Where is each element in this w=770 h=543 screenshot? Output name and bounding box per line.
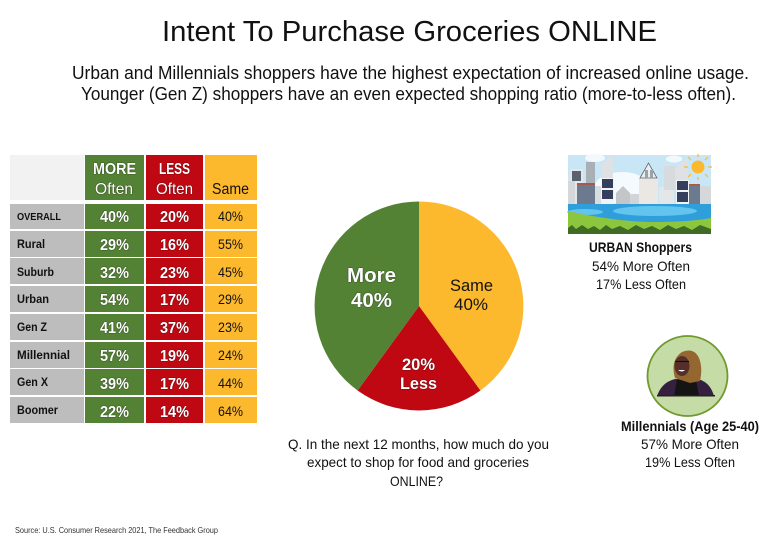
- row: boomer: 22%: [100, 404, 129, 421]
- row: rural: Rural: [17, 239, 45, 251]
- row: urban: 17%: [160, 292, 189, 309]
- row: rural: 55%: [218, 237, 243, 252]
- pie slice: same 40%: [419, 202, 523, 390]
- row: gen x: 44%: [218, 376, 243, 391]
- row: gen z: 23%: [218, 320, 243, 335]
- table header row: LESS: [159, 161, 190, 178]
- millennials text: Millennials (Age 25-40): [621, 418, 759, 434]
- row: urban: 54%: [100, 292, 129, 309]
- row: urban: [10, 286, 257, 312]
- row: millennial: 57%: [100, 348, 129, 365]
- source note: Source: U.S. Consumer Research 2021, The Feedback Group: [15, 525, 218, 535]
- urban shoppers text: URBAN Shoppers: [589, 239, 692, 255]
- pie slice: more 40%: [315, 202, 419, 390]
- row: boomer: Boomer: [17, 405, 58, 417]
- sun: [684, 154, 712, 180]
- question text: expect to shop for food and groceries: [307, 454, 529, 470]
- row: gen z: Gen Z: [17, 322, 47, 334]
- row: overall: 20%: [160, 209, 189, 226]
- row: millennial: 24%: [218, 348, 243, 363]
- row: gen x: 17%: [160, 376, 189, 393]
- row: millennial: 19%: [160, 348, 189, 365]
- table: purchase intent by segment: [10, 155, 257, 423]
- row: overall: OVERALL: [17, 212, 61, 223]
- row: suburb: 45%: [218, 265, 243, 280]
- millennials text: 57% More Often: [641, 436, 739, 452]
- subtitle: Urban and Millennials shoppers have the highest expectation of increased online usage.: [72, 63, 749, 83]
- pie label: less: 20%: [402, 356, 435, 374]
- question text: ONLINE?: [390, 473, 443, 489]
- row: boomer: [10, 397, 257, 423]
- row: urban: Urban: [17, 294, 49, 306]
- urban shoppers text: 17% Less Often: [596, 276, 686, 292]
- row: rural: 16%: [160, 237, 189, 254]
- millennials text: [621, 418, 759, 470]
- title: Intent To Purchase Groceries ONLINE: [162, 16, 657, 48]
- question text: Q. In the next 12 months, how much do you: [288, 436, 549, 452]
- pie label: same: 40%: [454, 295, 488, 314]
- row: suburb: 23%: [160, 265, 189, 282]
- urban shoppers text: 54% More Often: [592, 258, 690, 274]
- pie label: more: 40%: [351, 289, 392, 312]
- subtitle: [72, 63, 749, 104]
- table header row: Often: [95, 181, 133, 198]
- row: gen x: [10, 369, 257, 395]
- row: boomer: 14%: [160, 404, 189, 421]
- grass: [568, 211, 711, 234]
- urban shoppers text: [589, 239, 692, 292]
- row: millennial: Millennial: [17, 350, 70, 362]
- row: rural: [10, 231, 257, 257]
- pie label: more: More: [347, 264, 396, 287]
- row: overall: 40%: [218, 209, 243, 224]
- row: gen z: 41%: [100, 320, 129, 337]
- icon: millennial portrait: [648, 336, 728, 416]
- subtitle: Younger (Gen Z) shoppers have an even expected shopping ratio (more-to-less often).: [81, 84, 736, 104]
- table header row: Often: [156, 181, 193, 198]
- pie label: same: [450, 276, 493, 314]
- row: overall: [10, 204, 257, 229]
- row: gen x: 39%: [100, 376, 129, 393]
- pie label: less: Less: [400, 375, 437, 393]
- millennials text: 19% Less Often: [645, 454, 735, 470]
- lake: [568, 204, 711, 223]
- pie slice: less 20%: [358, 306, 480, 410]
- row: boomer: 64%: [218, 404, 243, 419]
- row: gen x: Gen X: [17, 377, 48, 389]
- row: urban: 29%: [218, 292, 243, 307]
- pie label: less: [400, 356, 437, 393]
- icon: city skyline illustration: [567, 154, 712, 234]
- pie label: same: Same: [450, 276, 493, 295]
- row: suburb: [10, 258, 257, 284]
- pie label: more: [347, 264, 396, 312]
- table header row: MORE: [93, 161, 136, 178]
- question text: [288, 436, 549, 489]
- row: rural: 29%: [100, 237, 129, 254]
- row: millennial: [10, 342, 257, 368]
- row: gen z: 37%: [160, 320, 189, 337]
- row: suburb: Suburb: [17, 267, 54, 279]
- table header row: [10, 155, 257, 200]
- pie chart: [315, 202, 523, 410]
- table header row: Same: [212, 181, 249, 198]
- buildings: [568, 156, 711, 205]
- row: suburb: 32%: [100, 265, 129, 282]
- row: overall: 40%: [100, 209, 129, 226]
- row: gen z: [10, 314, 257, 340]
